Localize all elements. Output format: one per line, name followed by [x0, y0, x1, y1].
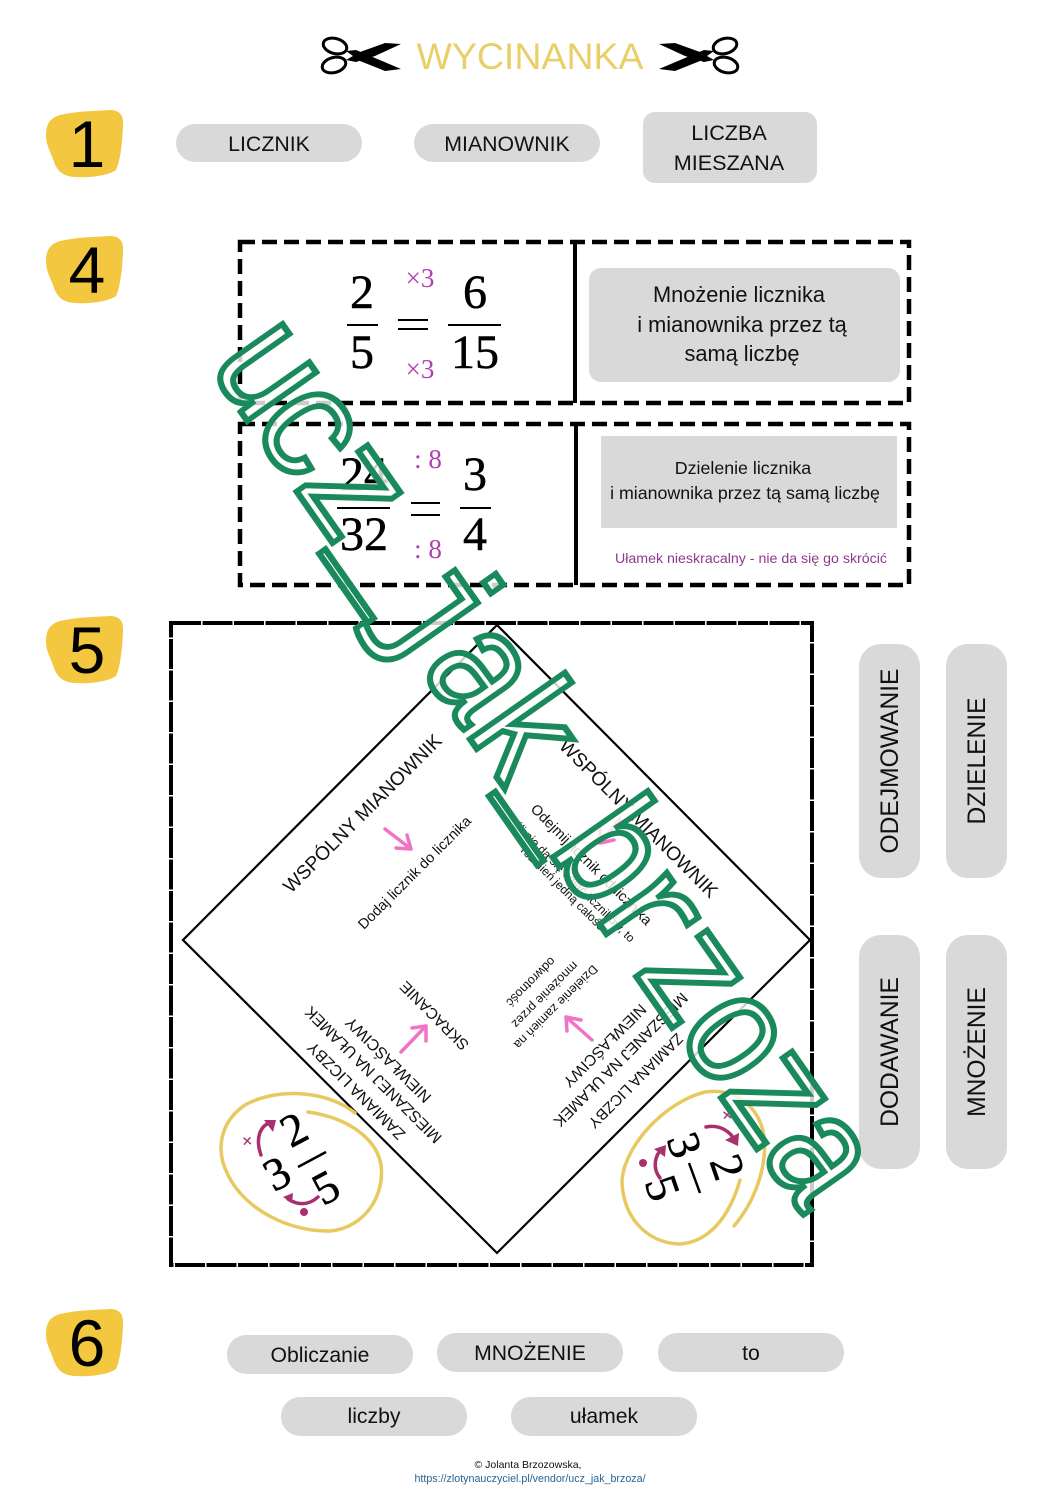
explanation: multiplying — [589, 268, 900, 382]
flap: division: odwrotność — [503, 954, 558, 1009]
explanation: multiplying: Mnożenie licznika — [653, 282, 826, 307]
label: dzielenie: DZIELENIE — [964, 697, 991, 825]
flap: division — [503, 954, 691, 1131]
flap: division: ZAMIANA LICZBY — [584, 1029, 686, 1131]
flap: subtraction: rozmień jedną całość — [518, 843, 608, 933]
fraction equation: 2/5 = 6/15: 5 — [350, 326, 374, 379]
fraction equation: 24/32 = 3/4: 24 — [340, 448, 388, 501]
fraction equation: 24/32 = 3/4: : 8 — [414, 444, 442, 474]
badge: number 1 — [46, 107, 123, 181]
label: liczba mieszana: MIESZANA — [674, 150, 785, 175]
flap: multiplication: SKRACANIE — [397, 977, 473, 1053]
footer credit: © Jolanta Brzozowska, — [475, 1459, 581, 1471]
title: WYCINANKA — [416, 35, 644, 77]
oval: right mixed number: 5 — [635, 1169, 691, 1207]
label: mianownik — [414, 124, 600, 162]
fraction equation: 2/5 = 6/15: ×3 — [406, 263, 434, 293]
fraction equation: 24/32 = 3/4: 32 — [340, 508, 388, 561]
oval: left mixed number: 2 — [272, 1101, 316, 1157]
panel: reducing fractions — [240, 424, 909, 585]
oval: left mixed number: + — [235, 1129, 258, 1154]
label: licznik: LICZNIK — [228, 132, 310, 156]
panel: expanding fractions — [240, 242, 909, 403]
label: odejmowanie — [859, 644, 920, 878]
label: odejmowanie: ODEJMOWANIE — [877, 669, 904, 853]
word: mnożenie — [437, 1333, 623, 1372]
flap: division: MIESZANEJ NA UŁAMEK — [549, 989, 691, 1130]
fraction equation: 2/5 = 6/15: 2 — [350, 266, 374, 319]
flap: subtraction: WSPÓLNY MIANOWNIK — [554, 734, 723, 903]
badge: number 1: 1 — [69, 107, 105, 181]
label: mnożenie — [946, 935, 1007, 1169]
fraction equation: 24/32 = 3/4: : 8 — [414, 534, 442, 564]
label: licznik — [176, 124, 362, 162]
word: to: to — [742, 1342, 760, 1365]
fraction equation: 24/32 = 3/4 — [337, 444, 491, 564]
note: irreducible fraction: Ułamek nieskracalny - nie da się go skrócić — [615, 551, 887, 567]
flap: multiplication: ZAMIANA LICZBY — [304, 1038, 409, 1142]
oval: right mixed number: 2 — [700, 1148, 756, 1186]
flap: multiplication: NIEWŁAŚCIWY — [341, 1013, 435, 1107]
badge: number 6 — [46, 1306, 123, 1380]
label: mianownik: MIANOWNIK — [444, 132, 570, 156]
fraction equation: 2/5 = 6/15: 15 — [451, 326, 499, 379]
oval: right mixed number: + — [715, 1103, 738, 1128]
footer credit — [414, 1459, 646, 1485]
badge: number 6: 6 — [69, 1306, 105, 1380]
fraction equation: 24/32 = 3/4: 4 — [463, 508, 487, 561]
oval: left mixed number: 3 — [255, 1145, 299, 1201]
label: dzielenie — [946, 644, 1007, 878]
explanation: dividing: Dzielenie licznika — [675, 458, 811, 478]
flap: addition — [278, 729, 476, 933]
oval: right mixed number — [622, 1091, 765, 1244]
explanation: dividing — [601, 436, 897, 528]
flap: subtraction: Odejmij licznik od licznika — [527, 801, 655, 930]
oval: right mixed number: 3 — [657, 1126, 713, 1164]
label: liczba mieszana: LICZBA — [691, 120, 767, 145]
fraction equation: 2/5 = 6/15: 6 — [463, 266, 487, 319]
word: ułamek — [511, 1397, 697, 1436]
panel: fortune teller cutout — [171, 623, 812, 1265]
badge: number 4 — [46, 233, 123, 307]
oval: left mixed number — [221, 1094, 382, 1231]
flap: division: mnożenie przez — [509, 959, 581, 1031]
flap: addition: WSPÓLNY MIANOWNIK — [278, 729, 447, 898]
label: dodawanie — [859, 935, 920, 1169]
flap: multiplication: MIESZANEJ NA UŁAMEK — [302, 1002, 446, 1146]
badge: number 5 — [46, 613, 123, 687]
flap: division: Dzielenie zamień na — [511, 962, 601, 1052]
explanation: dividing: i mianownika przez tą samą liczbę — [610, 483, 880, 503]
word: mnożenie: MNOŻENIE — [474, 1341, 586, 1365]
flap: subtraction — [502, 734, 723, 945]
word: to — [658, 1333, 844, 1372]
fraction equation: 2/5 = 6/15: ×3 — [406, 354, 434, 384]
label: liczba mieszana — [643, 112, 817, 183]
watermark: ucz_jak_brzoza — [166, 286, 912, 1244]
label: mnożenie: MNOŻENIE — [964, 987, 991, 1117]
badge: number 4: 4 — [69, 233, 105, 307]
fraction equation: 24/32 = 3/4: 3 — [463, 448, 487, 501]
footer credit: https://zlotynauczyciel.pl/vendor/ucz_jak_brzoza/ — [414, 1473, 646, 1485]
flap: division: NIEWŁAŚCIWY — [559, 1000, 650, 1091]
oval: left mixed number: 5 — [304, 1159, 348, 1215]
word: ułamek: ułamek — [570, 1405, 639, 1428]
flap: addition: Dodaj licznik do licznika — [355, 813, 476, 933]
label: dodawanie: DODAWANIE — [877, 977, 904, 1127]
explanation: multiplying: samą liczbę — [684, 341, 800, 366]
word: liczby: liczby — [348, 1405, 401, 1428]
fraction equation: 2/5 = 6/15 — [347, 263, 501, 384]
icon: right scissors — [659, 36, 740, 75]
flap: subtraction: Jeśli nie da się odjąć liczników, to — [502, 809, 638, 945]
diamond outline — [183, 625, 810, 1253]
word: obliczanie — [227, 1335, 413, 1374]
word: liczby — [281, 1397, 467, 1436]
badge: number 5: 5 — [69, 613, 105, 687]
icon: left scissors — [320, 36, 401, 75]
explanation: multiplying: i mianownika przez tą — [637, 312, 848, 337]
word: obliczanie: Obliczanie — [271, 1344, 369, 1367]
